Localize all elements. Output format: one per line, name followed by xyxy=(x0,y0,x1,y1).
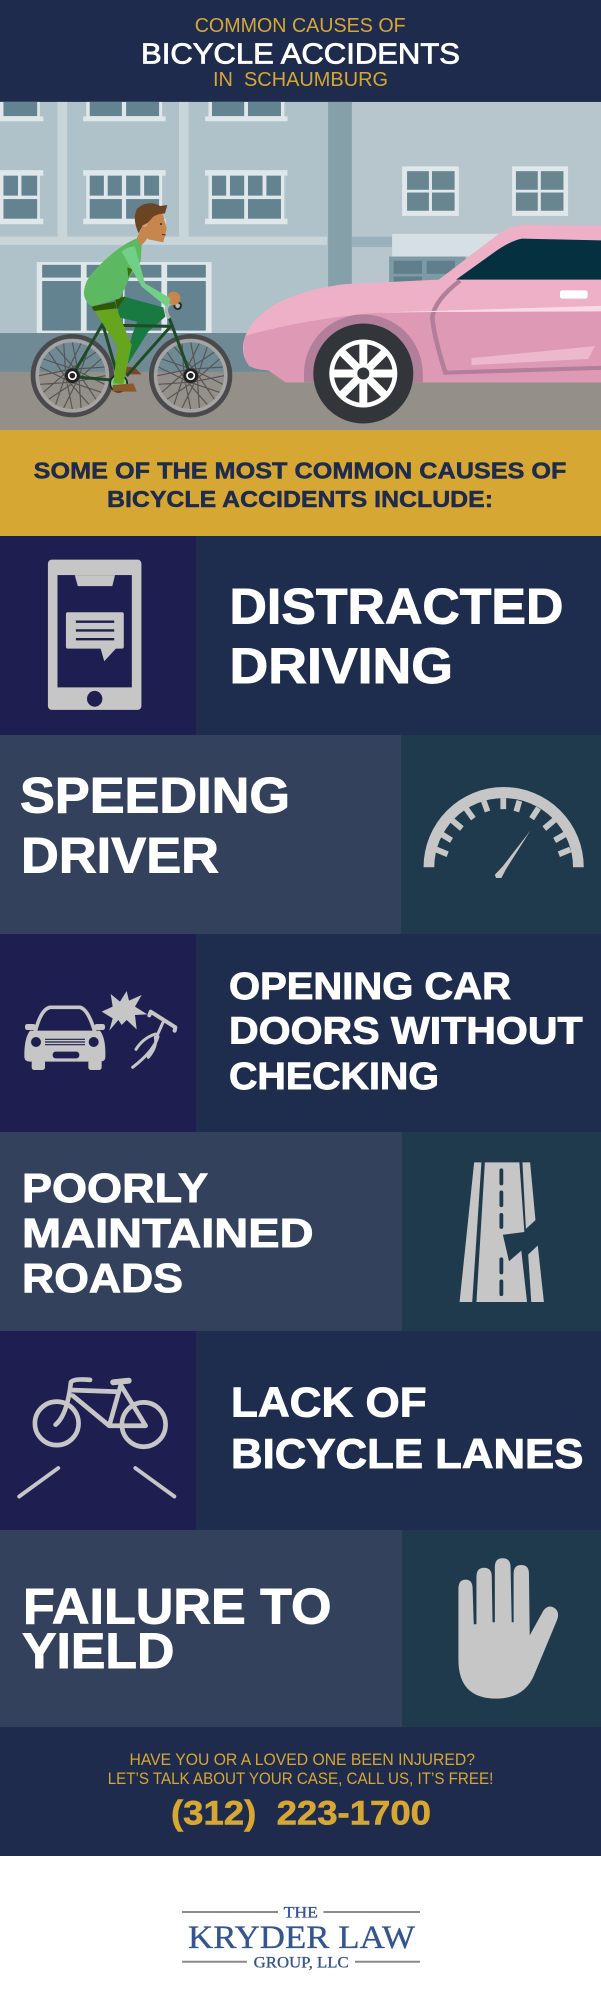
panel: failure to yield: YIELD xyxy=(22,1623,174,1679)
illustration: street scene xyxy=(0,102,601,433)
far leg xyxy=(118,297,165,374)
panel: opening car doors: OPENING CAR xyxy=(229,966,511,1008)
icon: car wheel xyxy=(313,324,413,423)
logo: The Kryder Law Group: GROUP, LLC xyxy=(254,1954,349,1972)
storefront xyxy=(389,234,507,283)
panel: gold banner: BICYCLE ACCIDENTS INCLUDE: xyxy=(107,486,493,512)
panel: speeding driver xyxy=(0,735,601,934)
panel: poorly maintained roads: POORLY xyxy=(22,1165,208,1211)
middle row windows xyxy=(0,170,287,224)
panel: distracted driving: DRIVING xyxy=(230,638,453,694)
lower window xyxy=(37,262,212,333)
icon: bicycle with lane lines xyxy=(19,1379,174,1497)
panel: header xyxy=(0,0,601,102)
icon: smartphone xyxy=(48,560,141,710)
panel: poorly maintained roads xyxy=(0,1132,601,1331)
top row windows xyxy=(0,102,287,121)
near leg xyxy=(91,297,137,392)
panel: lack of bicycle lanes: BICYCLE LANES xyxy=(231,1430,583,1477)
panel: call to action footer xyxy=(0,1727,601,1856)
icon: damaged road xyxy=(460,1162,544,1302)
panel: lack of bicycle lanes xyxy=(0,1331,601,1530)
panel: distracted driving xyxy=(0,536,601,735)
right building windows xyxy=(402,166,568,216)
logo: The Kryder Law Group: THE xyxy=(284,1905,318,1922)
panel: failure to yield xyxy=(0,1530,601,1727)
panel: failure to yield: FAILURE TO xyxy=(23,1578,332,1634)
icon: raised hand xyxy=(458,1558,558,1699)
head xyxy=(135,203,167,246)
panel: header: BICYCLE ACCIDENTS xyxy=(141,39,460,71)
panel: header: IN SCHAUMBURG xyxy=(213,69,388,91)
panel: opening car doors: DOORS WITHOUT xyxy=(229,1011,583,1053)
panel: opening car doors: CHECKING xyxy=(229,1056,439,1098)
logo: The Kryder Law Group xyxy=(182,1905,420,1972)
panel: call to action footer: (312) 223-1700 xyxy=(171,1795,431,1833)
torso and arm xyxy=(84,238,180,307)
panel: lack of bicycle lanes: LACK OF xyxy=(231,1379,427,1426)
panel: call to action footer: LET’S TALK ABOUT YOUR CASE, CALL US, IT’S FREE! xyxy=(108,1770,493,1788)
panel: call to action footer: HAVE YOU OR A LOVED ONE BEEN INJURED? xyxy=(130,1751,475,1769)
panel: poorly maintained roads: MAINTAINED xyxy=(22,1210,314,1256)
bicycle wheels xyxy=(33,336,230,415)
panel: distracted driving: DISTRACTED xyxy=(230,579,563,635)
panel: poorly maintained roads: ROADS xyxy=(22,1255,183,1301)
panel: speeding driver: DRIVER xyxy=(21,827,219,883)
illustration: cyclist on bicycle xyxy=(33,203,230,415)
bicycle frame xyxy=(72,318,191,381)
panel: gold banner xyxy=(0,430,601,536)
icon: speedometer xyxy=(424,787,584,878)
logo: The Kryder Law Group: KRYDER LAW xyxy=(188,1920,416,1956)
panel: speeding driver: SPEEDING xyxy=(20,768,290,824)
panel: header: COMMON CAUSES OF xyxy=(195,15,406,37)
panel: opening car doors xyxy=(0,934,601,1132)
handlebar and hubs xyxy=(65,302,198,393)
car body xyxy=(243,225,601,382)
sidewalk and road xyxy=(0,333,601,431)
icon: car and bicycle collision xyxy=(24,991,175,1070)
panel: gold banner: SOME OF THE MOST COMMON CAUSES OF xyxy=(34,458,566,484)
